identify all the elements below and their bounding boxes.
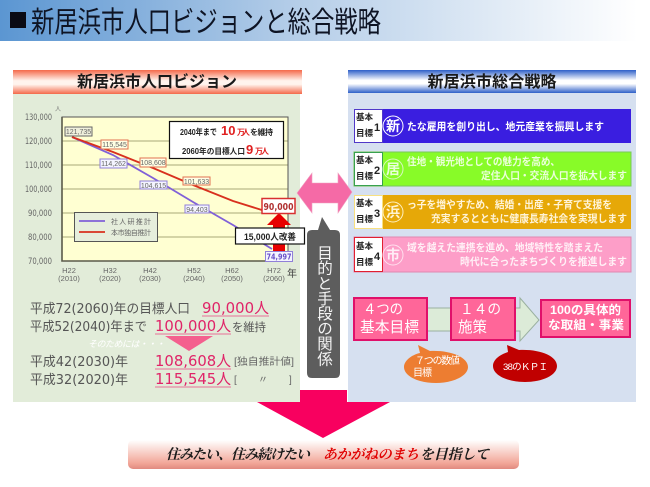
target 2040: 100,000人: [155, 317, 231, 335]
arrow: flow: [427, 298, 539, 341]
line chart: (2040): [183, 274, 205, 283]
goal 4: [354, 237, 631, 272]
banner: closing slogan: を目指して: [420, 447, 491, 463]
box: 14 measures: 施策: [458, 319, 487, 336]
bubble: 7 numeric targets: [404, 345, 468, 383]
goal 3: [354, 195, 631, 229]
goal 2: 定住人口・交流人口を拡大します: [481, 169, 627, 182]
goal 4: 目標: [356, 257, 374, 267]
box: 4 basic goals: 基本目標: [360, 319, 419, 336]
data labels: 121,735: [66, 129, 91, 136]
goal 3: 充実するとともに健康長寿社会を実現します: [431, 212, 627, 225]
line chart: H62: [225, 266, 239, 275]
target 2020: [30, 370, 292, 388]
arrow: improvement: [267, 213, 291, 252]
line chart: (2060): [263, 274, 285, 283]
series: national estimate: [72, 137, 272, 249]
box: 100 concrete actions: [541, 300, 630, 337]
note: for this purpose: そのためには・・・: [88, 339, 165, 349]
bubble: 38 KPI: [493, 345, 557, 382]
title: 新居浜市人口ビジョンと総合戦略: [31, 6, 381, 39]
callout: population targets: 10: [221, 123, 235, 138]
legend: [74, 212, 158, 242]
down triangle: [165, 336, 213, 351]
label: 90,000: 90,000: [264, 202, 294, 213]
line chart: H42: [143, 266, 157, 275]
callout: population targets: 2060年の目標人口: [182, 146, 245, 156]
data labels: 101,633: [184, 179, 209, 186]
banner: closing slogan: あかがねのまち: [323, 447, 419, 463]
legend: 本市独自推計: [111, 228, 151, 237]
goal 4: 4: [374, 251, 381, 263]
data labels: 114,262: [101, 161, 126, 168]
line chart: (2030): [139, 274, 161, 283]
box: 4 basic goals: [354, 298, 427, 340]
callout: population targets: 万人: [237, 128, 250, 137]
callout: population targets: 万人: [255, 147, 269, 156]
goal 3: っ子を増やすため、結婚・出産・子育て支援を: [407, 198, 612, 211]
callout: population targets: 9: [246, 142, 253, 157]
callout: 15,000 improvement: 15,000人改善: [244, 231, 296, 242]
target 2020: ]: [289, 375, 292, 386]
data labels: 104,615: [141, 183, 166, 190]
goal 2: 基本: [356, 155, 374, 165]
goal 2: 住地・観光地としての魅力を高め、: [407, 155, 560, 168]
goal 2: 2: [374, 165, 380, 177]
banner: closing slogan: 住みたい、住み続けたい: [166, 447, 311, 463]
population targets text: [30, 299, 294, 388]
vertical label: purpose and means: 目的と手段の関係: [315, 245, 333, 366]
box: 14 measures: １４の: [460, 301, 501, 317]
target 2030: [30, 352, 294, 370]
bubble: 7 numeric targets: 目標: [413, 366, 432, 379]
goal 2: 居: [386, 161, 400, 177]
callout: population targets: 2040年まで: [180, 127, 217, 137]
banner: closing slogan: [128, 440, 519, 469]
header band: [0, 0, 650, 41]
data labels: [65, 127, 210, 214]
line chart: H32: [103, 266, 117, 275]
target 2060: 平成72(2060)年の目標人口: [30, 302, 190, 317]
line chart: (2010): [58, 274, 80, 283]
target 2030: 108,608人: [155, 352, 231, 370]
target 2020: 平成32(2020)年: [30, 373, 128, 388]
goal 2: 目標: [356, 171, 374, 181]
double arrow: [297, 173, 352, 213]
data labels: 115,545: [102, 142, 127, 149]
goal 3: 浜: [386, 204, 400, 220]
goal 1: [354, 109, 631, 143]
vertical label: purpose and means: [307, 217, 340, 378]
line chart: H22: [62, 266, 76, 275]
target 2020: 〃: [258, 375, 268, 386]
line chart: 100,000: [25, 185, 52, 195]
panel heading: population vision: 新居浜市人口ビジョン: [77, 72, 237, 91]
target 2060: [30, 299, 269, 317]
callout: population targets: を維持: [250, 127, 273, 137]
panel heading: comprehensive strategy: 新居浜市総合戦略: [428, 72, 556, 91]
target 2040: を維持: [232, 320, 266, 334]
line chart: 年: [287, 267, 297, 280]
legend: 社人研推計: [111, 217, 151, 226]
goal 3: 目標: [356, 214, 374, 224]
goal 4: 時代に合ったまちづくりを推進します: [460, 255, 627, 268]
line chart: 人: [55, 106, 61, 113]
target 2060: 90,000人: [202, 299, 269, 317]
label: 90,000: [262, 198, 295, 214]
line chart: (2020): [99, 274, 121, 283]
target 2020: 115,545人: [155, 370, 231, 388]
goal 1: たな雇用を創り出し、地元産業を振興します: [407, 120, 604, 133]
panel: comprehensive strategy: [348, 70, 636, 402]
line chart: [25, 106, 304, 283]
line chart: 80,000: [28, 233, 52, 243]
series: city estimate: [72, 137, 265, 211]
callout: population targets: [170, 122, 284, 158]
panel heading: population vision: [13, 70, 302, 94]
goal 1: 新: [386, 118, 400, 134]
goal 4: 基本: [356, 241, 374, 251]
line chart: 120,000: [25, 137, 52, 147]
target 2040: [30, 317, 266, 335]
goal 2: [354, 152, 631, 186]
goal 1: 基本: [356, 112, 374, 122]
line chart: H72: [267, 266, 281, 275]
box: 100 concrete actions: な取組・事業: [548, 317, 624, 332]
goal 3: 3: [374, 208, 380, 220]
label: 74,997: 74,997: [266, 252, 292, 262]
data labels: 108,608: [140, 160, 166, 167]
bubble: 38 KPI: 38のＫＰＩ: [503, 362, 548, 373]
line chart: 110,000: [25, 161, 52, 171]
box: 4 basic goals: ４つの: [363, 301, 403, 317]
goal 4: 域を越えた連携を進め、地域特性を踏まえた: [407, 241, 603, 254]
callout: 15,000 improvement: [236, 228, 304, 244]
data labels: 94,403: [186, 207, 208, 214]
goal 3: 基本: [356, 198, 374, 208]
line chart: 70,000: [28, 257, 52, 267]
target 2030: 平成42(2030)年: [30, 355, 128, 370]
target 2020: [: [234, 375, 237, 386]
bubble: 7 numeric targets: ７つの数値: [415, 354, 460, 367]
big down arrow: [257, 390, 390, 438]
panel heading: comprehensive strategy: [348, 70, 636, 93]
line chart: 90,000: [28, 209, 52, 219]
panel: population vision: [13, 70, 304, 402]
box: 14 measures: [451, 298, 515, 340]
line chart: H52: [187, 266, 201, 275]
box: 100 concrete actions: 100の具体的: [550, 302, 621, 317]
target 2030: [独自推計値]: [234, 355, 294, 368]
line chart: 130,000: [25, 113, 52, 123]
goal 1: 1: [374, 122, 380, 134]
goal 1: 目標: [356, 128, 374, 138]
target 2040: 平成52(2040)年まで: [30, 320, 147, 335]
line chart: (2050): [221, 274, 243, 283]
goal 4: 市: [386, 247, 400, 263]
